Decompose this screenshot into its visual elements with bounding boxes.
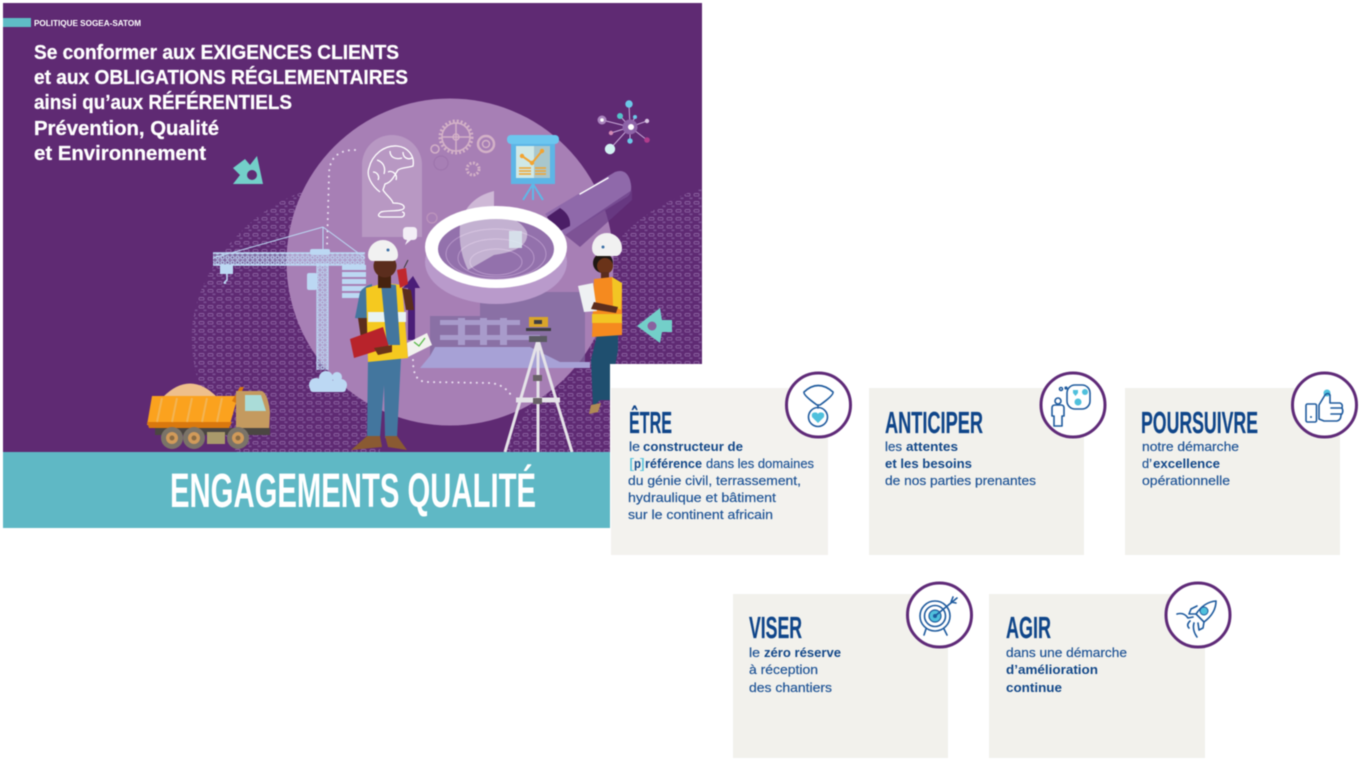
card: être: le bbox=[629, 439, 640, 454]
tag: section marker bbox=[3, 18, 141, 28]
pattern: left dotted hill bbox=[192, 193, 380, 452]
card: être bbox=[611, 373, 850, 555]
card: anticiper bbox=[869, 373, 1105, 555]
card: poursuivre: POURSUIVRE bbox=[1141, 405, 1258, 440]
illustration: gears bbox=[427, 121, 494, 223]
illustration: tower crane bbox=[213, 227, 366, 392]
tag: section marker: POLITIQUE SOGEA-SATOM bbox=[34, 19, 141, 28]
card: être: sur le continent africain bbox=[628, 507, 773, 522]
card: poursuivre: excellence bbox=[1153, 456, 1220, 471]
illustration: building and platform bbox=[420, 292, 590, 368]
card: viser bbox=[733, 583, 972, 758]
card: être: p bbox=[634, 456, 641, 471]
card: agir: d’amélioration bbox=[1006, 662, 1098, 677]
illustration: molecule network bbox=[598, 100, 650, 154]
illustration: large lilac circle bbox=[286, 98, 614, 426]
illustration: dump truck bbox=[147, 384, 270, 449]
card: être: dans les domaines bbox=[706, 456, 814, 471]
card: être: ] bbox=[640, 455, 645, 471]
card: agir: AGIR bbox=[1006, 610, 1051, 645]
icon: person thinking bbox=[1041, 373, 1105, 437]
icon: target with arrow bbox=[908, 583, 972, 647]
icon: rocket bbox=[1166, 583, 1230, 647]
illustration: worker with clipboard bbox=[578, 233, 622, 414]
icon: teal shape right bbox=[637, 308, 672, 343]
illustration: dotted path lower bbox=[413, 360, 513, 398]
illustration: worker with radio bbox=[350, 227, 432, 450]
card: viser: le bbox=[749, 645, 760, 660]
illustration: magnifying glass bbox=[425, 171, 632, 304]
card: être: hydraulique et bâtiment bbox=[628, 490, 776, 505]
card: anticiper: attentes bbox=[906, 439, 958, 454]
panel: cover poster bbox=[3, 3, 702, 452]
illustration: brain arch bbox=[362, 135, 422, 237]
heading: main statement: Se conformer aux EXIGENCES CLIENTS bbox=[34, 42, 399, 64]
card: poursuivre: d’ bbox=[1142, 456, 1152, 471]
card: viser: VISER bbox=[749, 610, 802, 645]
heading: main statement bbox=[34, 42, 408, 165]
heading: main statement: et aux OBLIGATIONS RÉGLEMENTAIRES bbox=[34, 66, 408, 89]
card: être: du génie civil, terrassement, bbox=[628, 473, 801, 488]
illustration: presentation board bbox=[507, 135, 559, 200]
card: être: [ bbox=[629, 455, 634, 471]
heading: main statement: ainsi qu’aux RÉFÉRENTIELS bbox=[34, 91, 292, 114]
white mask behind cards bbox=[610, 364, 702, 454]
card: agir: dans une démarche bbox=[1006, 645, 1127, 660]
card: agir bbox=[989, 583, 1230, 758]
pattern: right dotted hill bbox=[505, 188, 702, 452]
card: être: ÊTRE bbox=[629, 404, 672, 440]
card: être: constructeur de bbox=[643, 439, 743, 454]
card: viser: à réception bbox=[749, 662, 818, 677]
card: poursuivre: opérationnelle bbox=[1142, 473, 1230, 488]
icon: thumbs up bbox=[1292, 373, 1356, 437]
banner: engagements qualité bbox=[3, 452, 610, 528]
banner: engagements qualité: ENGAGEMENTS QUALITÉ bbox=[170, 464, 536, 518]
card: poursuivre: notre démarche bbox=[1142, 439, 1239, 454]
card: viser: zéro réserve bbox=[764, 645, 841, 660]
card: agir: continue bbox=[1006, 680, 1062, 695]
card: anticiper: de nos parties prenantes bbox=[885, 473, 1037, 488]
card: anticiper: ANTICIPER bbox=[885, 405, 983, 440]
icon: teal shape top bbox=[233, 156, 263, 184]
illustration: surveying tripod bbox=[505, 317, 572, 452]
icon: medal bbox=[786, 373, 850, 437]
card: viser: des chantiers bbox=[749, 680, 833, 695]
card: anticiper: et les besoins bbox=[885, 456, 972, 471]
card: poursuivre bbox=[1125, 373, 1356, 555]
heading: main statement: Prévention, Qualité bbox=[34, 118, 219, 140]
heading: main statement: et Environnement bbox=[34, 143, 206, 165]
card: être: référence bbox=[645, 456, 702, 471]
card: anticiper: les bbox=[885, 439, 903, 454]
illustration: dotted path upper bbox=[327, 150, 355, 247]
